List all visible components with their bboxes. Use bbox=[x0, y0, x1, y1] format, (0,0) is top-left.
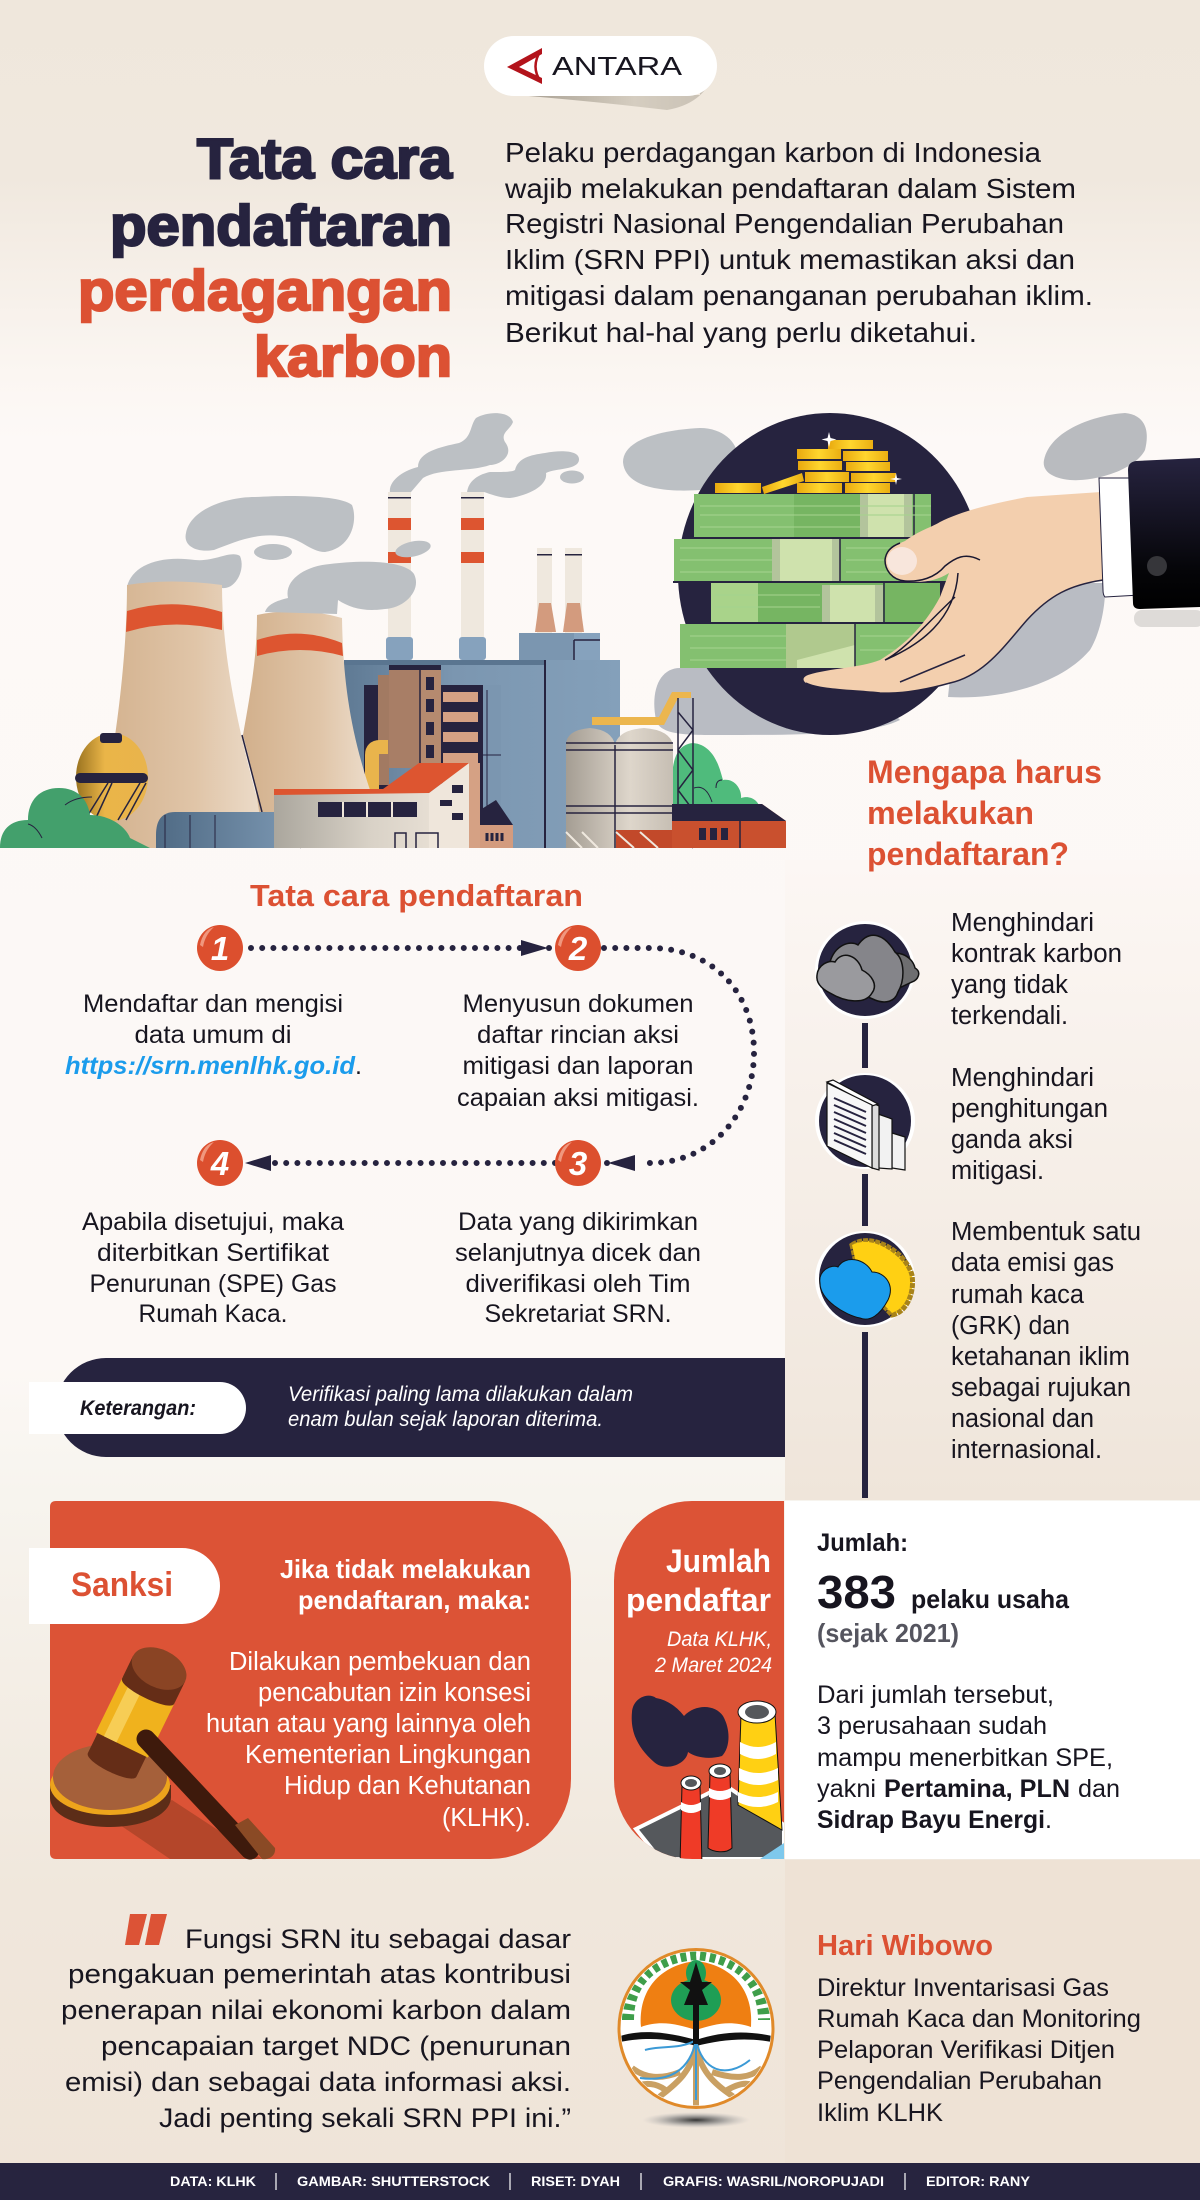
quote text: Jadi penting sekali SRN PPI ini.” bbox=[159, 2103, 571, 2133]
panel: jumlah details: Dari jumlah tersebut, bbox=[817, 1681, 1054, 1709]
illustration: smoke over chimney bbox=[265, 538, 432, 614]
illustration: chimneys and smoke bbox=[632, 1696, 784, 1865]
illustration: smoke clouds bbox=[127, 413, 1200, 735]
intro paragraph bbox=[504, 137, 1093, 348]
quote text: penerapan nilai ekonomi karbon dalam bbox=[61, 1995, 571, 2025]
jumlah pendaftar heading bbox=[626, 1543, 771, 1618]
step 1: https://srn.menlhk.go.id bbox=[65, 1052, 356, 1080]
step 1: Mendaftar dan mengisi bbox=[83, 990, 343, 1018]
sanksi heading bbox=[280, 1554, 531, 1615]
panel: jumlah details: 383 bbox=[817, 1566, 896, 1618]
reasons list: rumah kaca bbox=[951, 1281, 1085, 1309]
step 4: Penurunan (SPE) Gas bbox=[90, 1270, 336, 1298]
jumlah pendaftar heading: pendaftar bbox=[626, 1582, 771, 1618]
heading: Mengapa harus melakukan pendaftaran? bbox=[867, 754, 1102, 872]
timeline connector bbox=[862, 1023, 868, 1498]
icon: documents bbox=[815, 1073, 915, 1170]
footer credits: RISET: DYAH bbox=[531, 2174, 620, 2189]
footer credits: GRAFIS: WASRIL/NOROPUJADI bbox=[663, 2174, 884, 2189]
keterangan bar: Verifikasi paling lama dilakukan dalam bbox=[288, 1383, 633, 1406]
illustration: hand holding money bbox=[673, 413, 1200, 735]
illustration: factory bbox=[0, 492, 786, 848]
person: Hari Wibowo: Pelaporan Verifikasi Ditjen bbox=[817, 2036, 1115, 2064]
reasons list: yang tidak bbox=[951, 971, 1068, 999]
reasons list: kontrak karbon bbox=[951, 940, 1122, 968]
footer credits: DATA: KLHK bbox=[170, 2174, 256, 2189]
step 2: daftar rincian aksi bbox=[477, 1021, 679, 1049]
step 4: diterbitkan Sertifikat bbox=[97, 1239, 329, 1267]
icon: gavel bbox=[50, 1639, 275, 1859]
step 2: Menyusun dokumen bbox=[462, 990, 694, 1018]
data source: 2 Maret 2024 bbox=[654, 1654, 772, 1677]
panel: jumlah pendaftar bbox=[614, 1501, 784, 1865]
sanksi tab: Sanksi bbox=[71, 1566, 173, 1604]
quote text: pencapaian target NDC (penurunan bbox=[101, 2031, 571, 2061]
keterangan bar: Keterangan: bbox=[80, 1397, 196, 1420]
step 2 bbox=[457, 925, 699, 1112]
panel: jumlah details: Sidrap Bayu Energi bbox=[817, 1806, 1045, 1834]
panel: jumlah details: mampu menerbitkan SPE, bbox=[817, 1744, 1113, 1772]
step 4 bbox=[82, 1140, 344, 1328]
heading: Mengapa harus melakukan pendaftaran?: pendaftaran? bbox=[867, 836, 1069, 872]
logo: ANTARA bbox=[484, 36, 717, 110]
reasons list: ketahanan iklim bbox=[951, 1343, 1130, 1371]
footer credits: EDITOR: RANY bbox=[926, 2174, 1030, 2189]
panel: jumlah details: dan bbox=[1078, 1775, 1120, 1803]
flow: dotted connectors and arrows bbox=[245, 940, 754, 1171]
sanksi body text: pencabutan izin konsesi bbox=[258, 1679, 531, 1707]
step 4: Rumah Kaca. bbox=[138, 1300, 288, 1328]
reasons list: terkendali. bbox=[951, 1002, 1068, 1030]
logo: KLHK bbox=[619, 1950, 773, 2128]
step 3: diverifikasi oleh Tim bbox=[466, 1270, 690, 1298]
reasons list: internasional. bbox=[951, 1436, 1102, 1464]
panel: sanksi bbox=[29, 1501, 571, 1859]
sanksi body text: Kementerian Lingkungan bbox=[245, 1741, 531, 1769]
reasons list: penghitungan bbox=[951, 1095, 1108, 1123]
panel: jumlah details: yakni bbox=[817, 1775, 876, 1803]
reasons list: data emisi gas bbox=[951, 1249, 1114, 1277]
panel: jumlah details: 3 perusahaan sudah bbox=[817, 1712, 1047, 1740]
step 1 bbox=[65, 925, 362, 1080]
person: Hari Wibowo: Direktur Inventarisasi Gas bbox=[817, 1974, 1109, 2002]
sanksi body text: Dilakukan pembekuan dan bbox=[229, 1648, 531, 1676]
sanksi tab bbox=[29, 1548, 220, 1624]
sanksi heading: pendaftaran, maka: bbox=[298, 1585, 531, 1615]
step 1: . bbox=[355, 1052, 362, 1080]
title bbox=[78, 127, 453, 389]
sanksi body text: hutan atau yang lainnya oleh bbox=[206, 1710, 531, 1738]
reasons list bbox=[951, 909, 1141, 1464]
step 3: Data yang dikirimkan bbox=[458, 1208, 698, 1236]
intro paragraph: wajib melakukan pendaftaran dalam Sistem bbox=[504, 173, 1076, 204]
intro paragraph: Pelaku perdagangan karbon di Indonesia bbox=[505, 137, 1041, 168]
sanksi body text: Hidup dan Kehutanan bbox=[284, 1772, 531, 1800]
reasons list: ganda aksi bbox=[951, 1126, 1073, 1154]
reasons list: mitigasi. bbox=[951, 1157, 1044, 1185]
panel: jumlah details: Jumlah: bbox=[817, 1529, 908, 1557]
person: Hari Wibowo bbox=[817, 1930, 1141, 2127]
reasons list: (GRK) dan bbox=[951, 1312, 1070, 1340]
icon: dark clouds bbox=[815, 921, 919, 1019]
footer credits bbox=[0, 2163, 1200, 2200]
panel: jumlah details: . bbox=[1045, 1806, 1052, 1834]
panel: jumlah details bbox=[785, 1501, 1200, 1859]
step 2: mitigasi dan laporan bbox=[462, 1052, 694, 1080]
title: karbon bbox=[254, 325, 452, 389]
step 1: 1 bbox=[211, 930, 229, 967]
jumlah pendaftar heading: Jumlah bbox=[666, 1543, 771, 1579]
sanksi heading: Jika tidak melakukan bbox=[280, 1554, 531, 1584]
title: Tata cara bbox=[197, 127, 453, 191]
intro paragraph: Registri Nasional Pengendalian Perubahan bbox=[505, 208, 1064, 239]
keterangan bar bbox=[29, 1358, 785, 1457]
title: perdagangan bbox=[78, 259, 452, 323]
person: Hari Wibowo: Iklim KLHK bbox=[817, 2099, 943, 2127]
person: Hari Wibowo: Rumah Kaca dan Monitoring bbox=[817, 2005, 1141, 2033]
person: Hari Wibowo: Pengendalian Perubahan bbox=[817, 2067, 1102, 2095]
quote text: Fungsi SRN itu sebagai dasar bbox=[185, 1924, 571, 1954]
person: Hari Wibowo: Hari Wibowo bbox=[817, 1930, 993, 1962]
data source bbox=[654, 1628, 772, 1677]
step 3 bbox=[455, 1140, 701, 1328]
intro paragraph: mitigasi dalam penanganan perubahan iklim. bbox=[505, 280, 1093, 311]
step 3: 3 bbox=[569, 1145, 587, 1182]
step 2: 2 bbox=[568, 930, 588, 967]
logo: ANTARA: ANTARA bbox=[552, 51, 683, 81]
sanksi body text bbox=[206, 1648, 531, 1832]
reasons list: Menghindari bbox=[951, 1064, 1094, 1092]
quote text bbox=[61, 1924, 571, 2133]
step 3: selanjutnya dicek dan bbox=[455, 1239, 701, 1267]
panel: jumlah details: pelaku usaha bbox=[911, 1584, 1070, 1614]
keterangan bar: enam bulan sejak laporan diterima. bbox=[288, 1408, 603, 1431]
quote mark bbox=[125, 1914, 167, 1945]
quote text: pengakuan pemerintah atas kontribusi bbox=[68, 1959, 571, 1989]
intro paragraph: Iklim (SRN PPI) untuk memastikan aksi dan bbox=[505, 244, 1075, 275]
icon: blue cloud and gear bbox=[815, 1231, 915, 1327]
step 3: Sekretariat SRN. bbox=[484, 1300, 672, 1328]
footer credits: GAMBAR: SHUTTERSTOCK bbox=[297, 2174, 490, 2189]
quote text: emisi) dan sebagai data informasi aksi. bbox=[65, 2067, 571, 2097]
step 4: Apabila disetujui, maka bbox=[82, 1208, 344, 1236]
data source: Data KLHK, bbox=[667, 1628, 772, 1651]
step 4: 4 bbox=[210, 1145, 229, 1182]
reasons list: Membentuk satu bbox=[951, 1218, 1141, 1246]
step 2: capaian aksi mitigasi. bbox=[457, 1084, 699, 1112]
heading: Tata cara pendaftaran: Tata cara pendaftaran bbox=[250, 878, 583, 913]
sanksi body text: (KLHK). bbox=[442, 1804, 531, 1832]
step 1: data umum di bbox=[134, 1021, 292, 1049]
reasons list: sebagai rujukan bbox=[951, 1374, 1131, 1402]
intro paragraph: Berikut hal-hal yang perlu diketahui. bbox=[505, 317, 977, 348]
heading: Mengapa harus melakukan pendaftaran?: Mengapa harus bbox=[867, 754, 1102, 790]
panel: jumlah details: (sejak 2021) bbox=[817, 1618, 959, 1648]
reasons list: Menghindari bbox=[951, 909, 1094, 937]
panel: jumlah details: Pertamina, PLN bbox=[884, 1775, 1070, 1803]
reasons list: nasional dan bbox=[951, 1405, 1094, 1433]
title: pendaftaran bbox=[110, 194, 452, 258]
heading: Mengapa harus melakukan pendaftaran?: melakukan bbox=[867, 795, 1034, 831]
